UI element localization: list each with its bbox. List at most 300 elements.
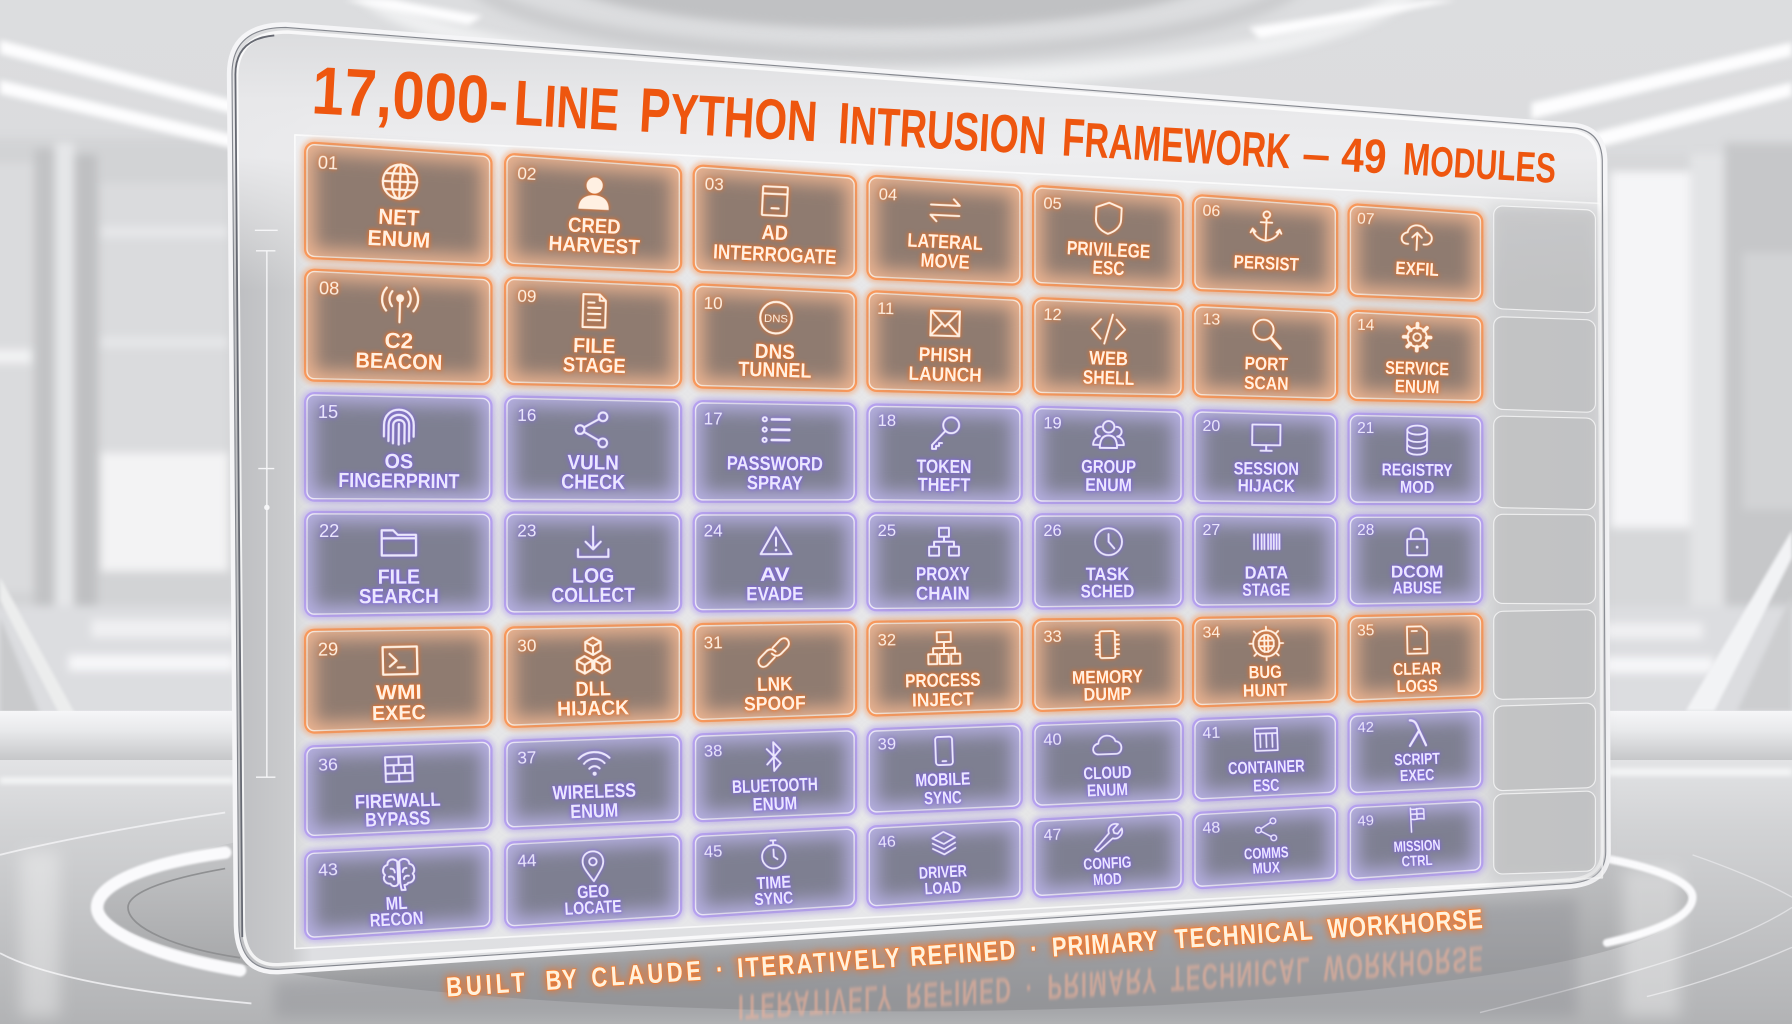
label: PORT SCAN [1244, 352, 1289, 394]
label: TASK SCHED [1081, 563, 1134, 601]
label: CLOUD ENUM: CLOUD [1083, 762, 1132, 783]
label: DRIVER LOAD [918, 861, 967, 898]
module 31 [703, 631, 847, 716]
label: WEB SHELL: WEB [1089, 347, 1128, 370]
number 15: 15 [318, 401, 338, 422]
icon: document [583, 294, 606, 328]
module 41 [1202, 723, 1328, 796]
label: PASSWORD SPRAY [727, 452, 823, 495]
icon: fingerprint [384, 410, 414, 445]
label: MOBILE SYNC: SYNC [924, 787, 962, 808]
label: COMMS MUX [1244, 844, 1289, 878]
number 41: 41 [1202, 725, 1221, 743]
icon: firewall bricks [385, 756, 413, 782]
label: PROCESS INJECT: PROCESS [905, 669, 981, 691]
number 10: 10 [703, 293, 723, 313]
module 45 [703, 837, 847, 909]
number 40: 40 [1043, 730, 1062, 749]
label: DCOM ABUSE: ABUSE [1393, 577, 1442, 598]
icon: brain [383, 858, 415, 891]
label: PROXY CHAIN: CHAIN [916, 583, 970, 604]
label: ML RECON [369, 892, 424, 931]
number 03: 03 [704, 174, 724, 194]
icon: wifi [578, 752, 610, 776]
label: PORT SCAN: PORT [1244, 352, 1288, 375]
icon: anchor [1250, 211, 1282, 241]
number 19: 19 [1043, 413, 1062, 432]
label: SERVICE ENUM: ENUM [1395, 375, 1440, 397]
label: TIME SYNC [754, 871, 794, 909]
module 10 [703, 293, 847, 383]
icon: cubes [576, 637, 610, 674]
number 22: 22 [319, 520, 339, 541]
label: DLL HIJACK: DLL [575, 677, 611, 701]
module 46 [877, 829, 1013, 898]
icon: network boxes [929, 528, 959, 556]
label: ML RECON: ML [385, 892, 408, 914]
tagline: BY [545, 965, 578, 997]
label: SCRIPT EXEC: SCRIPT [1394, 751, 1440, 769]
module 28 [1357, 522, 1473, 598]
icon: DNS badge [760, 302, 792, 334]
label: LATERAL MOVE [907, 230, 983, 274]
label: C2 BEACON: C2 [384, 328, 413, 353]
label: FIREWALL BYPASS: BYPASS [365, 807, 431, 832]
label: DCOM ABUSE: DCOM [1391, 561, 1443, 582]
label: CLEAR LOGS [1393, 658, 1442, 696]
label: CONFIG MOD: MOD [1093, 871, 1122, 889]
number 12: 12 [1043, 305, 1062, 324]
label: MEMORY DUMP: MEMORY [1072, 665, 1143, 688]
label: TASK SCHED: SCHED [1081, 580, 1134, 601]
module 05 [1042, 194, 1174, 281]
module 14 [1357, 317, 1473, 397]
label: BLUETOOTH ENUM: BLUETOOTH [732, 773, 818, 797]
label: COMMS MUX: MUX [1252, 859, 1281, 878]
label: FILE STAGE [563, 334, 626, 378]
module 16 [514, 405, 672, 494]
label: AD INTERROGATE: AD [761, 221, 789, 245]
label: PASSWORD SPRAY: SPRAY [747, 472, 803, 495]
icon: list [762, 417, 790, 442]
label: WMI EXEC: EXEC [372, 701, 426, 725]
label: TIME SYNC: TIME [756, 871, 791, 893]
tagline: BUILT [445, 968, 526, 1003]
module 18 [877, 411, 1013, 495]
label: CLOUD ENUM: ENUM [1087, 779, 1128, 800]
module 36 [314, 750, 482, 832]
number 06: 06 [1202, 203, 1221, 220]
module 21 [1357, 420, 1473, 497]
label: CONFIG MOD [1083, 854, 1132, 889]
label: PROCESS INJECT [905, 669, 981, 711]
number 09: 09 [517, 286, 537, 306]
number 01: 01 [317, 151, 339, 173]
number 16: 16 [517, 405, 536, 425]
tagline: · [715, 955, 724, 985]
label: REGISTRY MOD [1382, 459, 1453, 497]
measurement scale on left edge [255, 230, 278, 777]
icon: layers [932, 831, 956, 855]
label: LATERAL MOVE: MOVE [920, 250, 970, 274]
tagline [445, 905, 1484, 1003]
icon: file [1407, 626, 1427, 654]
tagline: ITERATIVELY [736, 943, 901, 984]
number 31: 31 [703, 632, 723, 652]
label: TIME SYNC: SYNC [754, 887, 794, 909]
label: OS FINGERPRINT: OS [384, 450, 413, 473]
number 35: 35 [1357, 622, 1374, 640]
number 13: 13 [1202, 311, 1221, 329]
number 17: 17 [704, 408, 723, 428]
module 02 [514, 163, 672, 263]
label: FILE SEARCH [359, 566, 439, 608]
label: FILE STAGE: STAGE [563, 353, 626, 378]
icon: user group [1093, 421, 1124, 448]
title [310, 53, 1557, 193]
panel: glass board [230, 25, 1608, 972]
label: SCRIPT EXEC [1394, 751, 1440, 785]
label: MEMORY DUMP: DUMP [1083, 683, 1132, 705]
label: LOG COLLECT: LOG [572, 564, 614, 588]
label: CLEAR LOGS: LOGS [1396, 675, 1438, 696]
module 29 [314, 637, 482, 725]
module 06 [1202, 203, 1328, 286]
label: TOKEN THEFT: THEFT [918, 474, 971, 495]
number 43: 43 [318, 859, 338, 880]
module 20 [1202, 418, 1328, 496]
module 11 [877, 299, 1013, 387]
label: MOBILE SYNC: MOBILE [915, 768, 971, 790]
module 47 [1042, 822, 1174, 889]
module 08 [314, 277, 482, 375]
number 25: 25 [878, 521, 896, 540]
icon: chain link [758, 638, 789, 667]
module 30 [514, 634, 672, 721]
icon: lambda [1409, 720, 1426, 746]
label: FIREWALL BYPASS: FIREWALL [354, 789, 441, 814]
title: FRAMEWORK [1061, 108, 1293, 180]
title: 17,000- [310, 53, 510, 139]
module 33 [1042, 627, 1174, 705]
label: SERVICE ENUM [1385, 357, 1449, 397]
module 26 [1042, 521, 1174, 601]
icon: globe [382, 164, 418, 200]
tagline: REFINED [909, 936, 1016, 973]
module 43 [314, 853, 482, 931]
label: PHISH LAUNCH: PHISH [919, 344, 972, 367]
label: FILE SEARCH: SEARCH [359, 585, 439, 608]
label: DATA STAGE: STAGE [1242, 580, 1290, 600]
label: TOKEN THEFT [916, 455, 972, 495]
icon: bluetooth [766, 742, 781, 771]
label: DRIVER LOAD: DRIVER [918, 861, 967, 883]
label: VULN CHECK: CHECK [561, 470, 625, 494]
icon: hierarchy [928, 632, 960, 664]
label: LOG COLLECT [551, 564, 635, 607]
label: SESSION HIJACK [1234, 458, 1299, 496]
label: CONFIG MOD: CONFIG [1083, 854, 1132, 874]
label: DNS TUNNEL: DNS [755, 340, 795, 364]
icon: key [932, 417, 959, 449]
number 39: 39 [877, 734, 896, 754]
icon: phone [935, 737, 953, 765]
icon: share nodes [576, 412, 607, 447]
icon: gear [1403, 323, 1431, 351]
number 48: 48 [1202, 820, 1221, 838]
label: NET ENUM: NET [378, 204, 421, 231]
label: REGISTRY MOD: REGISTRY [1382, 459, 1453, 480]
label: LNK SPOOF: LNK [757, 673, 793, 696]
label: PORT SCAN: SCAN [1244, 372, 1289, 394]
tagline: WORKHORSE [1326, 905, 1484, 945]
label: LNK SPOOF: SPOOF [744, 692, 806, 716]
label: SESSION HIJACK: SESSION [1234, 458, 1299, 479]
icon: terminal [383, 646, 417, 675]
label: WMI EXEC: WMI [376, 681, 422, 705]
module 13 [1202, 311, 1328, 394]
label: BLUETOOTH ENUM: ENUM [752, 792, 798, 815]
icon: lateral arrows [930, 198, 960, 222]
module 27 [1202, 522, 1328, 600]
title: PYTHON [638, 76, 820, 155]
title: MODULES [1402, 133, 1557, 193]
icon: clock [1095, 528, 1122, 555]
number 08: 08 [319, 277, 340, 299]
module 35 [1357, 622, 1473, 696]
icon: lock [1407, 528, 1427, 555]
label: DNS TUNNEL [738, 340, 812, 383]
label: AV EVADE: AV [760, 564, 790, 586]
label: DCOM ABUSE [1391, 561, 1443, 598]
icon: wrench [1094, 824, 1123, 851]
icon: memory chip [1096, 631, 1119, 658]
label: PROXY CHAIN: PROXY [916, 563, 970, 584]
icon: antenna [381, 287, 418, 323]
icon: DNS badge: DNS [764, 313, 789, 325]
label: SCRIPT EXEC: EXEC [1400, 767, 1435, 785]
number 32: 32 [877, 630, 896, 650]
label: BUG HUNT: BUG [1248, 662, 1282, 682]
label: C2 BEACON [355, 328, 443, 375]
icon: magnifier [1253, 319, 1281, 349]
module 09 [514, 286, 672, 378]
label: SERVICE ENUM: SERVICE [1385, 357, 1449, 379]
number 27: 27 [1203, 522, 1220, 539]
label: WMI EXEC [372, 681, 426, 725]
label: GEO LOCATE: GEO [577, 881, 610, 902]
module 04 [877, 184, 1013, 275]
label: PHISH LAUNCH [908, 344, 982, 387]
label: PRIVILEGE ESC: ESC [1092, 257, 1125, 280]
module 22 [314, 520, 482, 608]
label: DLL HIJACK [557, 677, 630, 721]
label: GEO LOCATE [564, 881, 622, 919]
label: PRIVILEGE ESC [1066, 237, 1151, 280]
label: GEO LOCATE: LOCATE [564, 896, 622, 919]
icon: cloud upload [1401, 225, 1432, 251]
label: LATERAL MOVE: LATERAL [907, 230, 983, 255]
label: WIRELESS ENUM: ENUM [570, 800, 619, 823]
label: BUG HUNT: HUNT [1243, 680, 1288, 701]
label: OS FINGERPRINT: FINGERPRINT [338, 469, 460, 493]
number 07: 07 [1357, 211, 1375, 228]
number 47: 47 [1043, 826, 1062, 844]
label: GROUP ENUM: ENUM [1085, 474, 1132, 495]
tagline: CLAUDE [590, 957, 702, 994]
module 24 [703, 520, 847, 605]
label: MISSION CTRL: CTRL [1401, 853, 1433, 870]
label: DRIVER LOAD: LOAD [924, 878, 962, 898]
number 34: 34 [1202, 624, 1221, 642]
icon: envelope [930, 311, 960, 336]
number 44: 44 [517, 850, 537, 871]
icon: share nodes small [1255, 818, 1277, 842]
module 42 [1357, 719, 1473, 785]
label: AV EVADE: EVADE [746, 583, 804, 605]
label: CRED HARVEST: CRED [567, 214, 621, 239]
label: PROXY CHAIN [916, 563, 970, 604]
module 34 [1202, 624, 1328, 701]
icon: container [1255, 728, 1278, 751]
icon: database [1407, 425, 1427, 455]
label: CLOUD ENUM [1083, 762, 1132, 800]
label: DATA STAGE: DATA [1245, 562, 1288, 583]
icon: monitor [1252, 424, 1280, 451]
label: GROUP ENUM: GROUP [1081, 455, 1136, 477]
module 48 [1202, 815, 1328, 879]
icon: folder [382, 530, 416, 555]
number 11: 11 [877, 299, 895, 318]
label: PERSIST: PERSIST [1233, 251, 1299, 275]
title: INTRUSION [837, 91, 1048, 167]
icon: warning triangle [761, 527, 791, 554]
label: ML RECON: RECON [369, 907, 424, 931]
number 45: 45 [703, 841, 723, 861]
module 19 [1042, 413, 1174, 495]
label: COMMS MUX: COMMS [1244, 844, 1289, 863]
module 07 [1357, 211, 1473, 291]
icon: stopwatch [761, 840, 786, 869]
label: EXFIL: EXFIL [1395, 257, 1439, 280]
module 03 [703, 174, 847, 269]
label: WIRELESS ENUM [552, 779, 636, 823]
label: MOBILE SYNC [915, 768, 971, 808]
number 49: 49 [1357, 813, 1374, 830]
icon: person [578, 177, 610, 210]
label: BUG HUNT [1243, 662, 1288, 701]
empty slots column [1494, 206, 1595, 874]
label: PASSWORD SPRAY: PASSWORD [727, 452, 823, 476]
number 04: 04 [878, 184, 898, 204]
label: FIREWALL BYPASS [354, 789, 441, 832]
module 23 [514, 520, 672, 607]
label: LOG COLLECT: COLLECT [551, 584, 635, 607]
label: SESSION HIJACK: HIJACK [1238, 475, 1295, 496]
label: PHISH LAUNCH: LAUNCH [908, 363, 982, 387]
title: — [1302, 128, 1330, 181]
label: DNS TUNNEL: TUNNEL [738, 358, 812, 383]
label: AD INTERROGATE [713, 221, 837, 269]
label: MISSION CTRL [1393, 838, 1441, 870]
label: WIRELESS ENUM: WIRELESS [552, 779, 636, 805]
number 38: 38 [704, 741, 723, 761]
label: CRED HARVEST [548, 214, 641, 259]
label: REGISTRY MOD: MOD [1400, 477, 1434, 497]
icon: code brackets [1092, 314, 1125, 344]
module 49 [1357, 807, 1473, 871]
label: VULN CHECK [561, 451, 625, 494]
number 02: 02 [517, 163, 537, 184]
number 23: 23 [517, 520, 536, 540]
label: LNK SPOOF [744, 673, 806, 716]
module 32 [877, 629, 1013, 711]
icon: bug target [1249, 626, 1284, 661]
number 42: 42 [1357, 720, 1374, 736]
icon: location pin [582, 851, 604, 882]
icon: barcode [1254, 534, 1279, 549]
number 18: 18 [878, 411, 896, 430]
number 21: 21 [1357, 420, 1374, 437]
label: DATA STAGE [1242, 562, 1290, 600]
module 01 [314, 151, 482, 256]
label: NET ENUM [367, 204, 431, 253]
icon: download [578, 526, 608, 557]
label: WEB SHELL [1083, 347, 1135, 390]
number 36: 36 [318, 754, 338, 775]
tagline: TECHNICAL [1174, 916, 1314, 955]
label: FILE SEARCH: FILE [378, 566, 420, 589]
module 25 [877, 521, 1013, 604]
tagline: · [1029, 934, 1039, 965]
label: CONTAINER ESC [1228, 755, 1305, 796]
label: CLEAR LOGS: CLEAR [1393, 658, 1442, 679]
icon: cloud [1093, 735, 1122, 755]
number 46: 46 [878, 833, 896, 851]
label: OS FINGERPRINT [338, 450, 460, 493]
number 05: 05 [1043, 194, 1062, 213]
number 24: 24 [704, 520, 723, 540]
icon: shield [1095, 202, 1122, 234]
number 28: 28 [1357, 522, 1374, 539]
label: CONTAINER ESC: ESC [1253, 775, 1280, 796]
label: AD INTERROGATE: INTERROGATE [713, 240, 837, 269]
tagline: PRIMARY [1051, 926, 1159, 963]
number 30: 30 [517, 636, 537, 656]
icon: flag [1410, 807, 1425, 832]
number 37: 37 [517, 747, 537, 768]
number 20: 20 [1202, 418, 1221, 435]
label: MISSION CTRL: MISSION [1393, 838, 1441, 856]
module 12 [1042, 305, 1174, 390]
number 14: 14 [1357, 317, 1375, 334]
label: AV EVADE [746, 564, 804, 605]
label: CONTAINER ESC: CONTAINER [1228, 755, 1305, 778]
label: TOKEN THEFT: TOKEN [916, 455, 972, 477]
label: WEB SHELL: SHELL [1083, 367, 1135, 390]
module 15 [314, 401, 482, 493]
module 37 [514, 744, 672, 823]
label: NET ENUM: ENUM [367, 225, 431, 253]
module 17 [703, 408, 847, 495]
label: PRIVILEGE ESC: PRIVILEGE [1066, 237, 1151, 263]
label: DLL HIJACK: HIJACK [557, 696, 630, 721]
number 29: 29 [318, 638, 338, 660]
module 38 [703, 738, 847, 815]
number 33: 33 [1043, 627, 1062, 646]
label: C2 BEACON: BEACON [355, 347, 443, 375]
label: FILE STAGE: FILE [573, 334, 616, 358]
